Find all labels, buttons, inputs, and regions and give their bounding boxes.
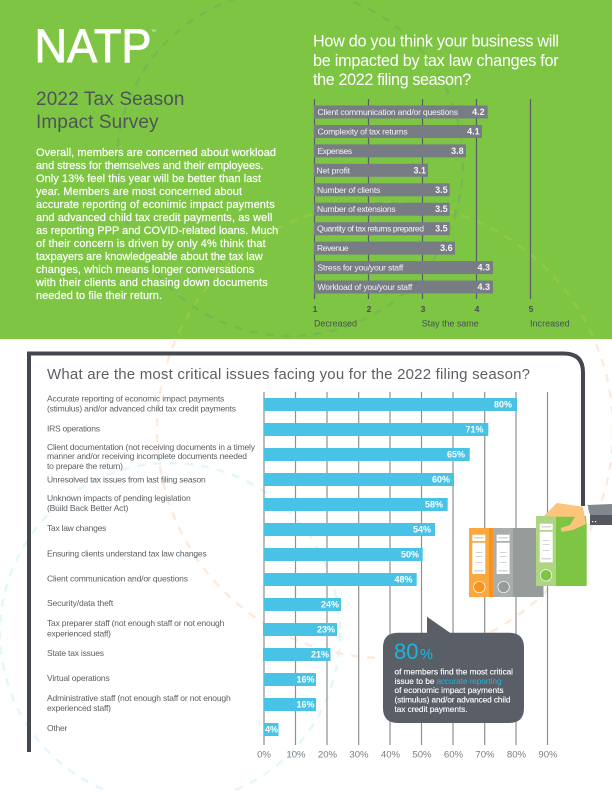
bar chart: business impact: Revenue [317,243,349,253]
icon: sleeve [585,504,612,525]
issue labels: experienced staff) [47,628,111,638]
icon: grey binder [493,528,544,597]
issue labels: Unknown impacts of pending legislation [47,493,191,503]
bar chart: business impact: 3.5 [435,185,448,195]
bar chart: business impact: Expenses [318,146,352,156]
heading: critical issues question: What are the most critical issues facing you for the 2022 filing season? [47,366,530,383]
heading: business impact question: be impacted by tax law changes for [313,52,559,70]
issue labels: Client documentation (not receiving documents in a timely [47,442,256,452]
icon: hand [544,503,586,532]
bar chart: critical issues [47,392,558,760]
percent axis labels: 20% [318,750,338,760]
text block: survey summary: accurate reporting of econimic impact payments [36,199,275,211]
issue labels: Virtual operations [47,673,110,683]
issue labels: Security/data theft [47,598,114,608]
text block: survey summary: year. Members are most concerned about [36,186,242,198]
heading: business impact question [313,32,559,89]
issue labels: Unresolved tax issues from last filing season [47,474,206,484]
icon: green binder [536,516,587,586]
bar chart: business impact: Net profit [316,165,351,175]
callout: 80 percent: of members find the most critical [394,666,513,676]
text block: survey summary: and advanced child tax credit payments, as well [36,212,272,224]
bar chart: business impact: 4.2 [472,107,485,117]
bar chart: critical issues: 48% [394,574,412,584]
percent axis labels: 70% [475,750,495,760]
bar chart: business impact: 4.3 [477,263,490,273]
axis scale labels: 3 [421,304,426,314]
callout: 80 percent: accurate reporting [436,676,502,686]
percent axis labels [257,750,558,760]
axis scale labels [313,304,570,329]
bar chart: business impact: 3.8 [451,146,464,156]
bar chart: critical issues: 24% [321,600,339,610]
bar chart: critical issues: 80% [494,400,512,410]
bar chart: business impact: Complexity of tax returns [318,126,408,136]
issue labels: Client communication and/or questions [47,574,188,584]
bar chart: business impact: Stress for you/your staff [318,263,404,273]
callout: 80 percent: issue to be [394,676,435,686]
bar chart: business impact: 3.5 [435,224,448,234]
bar chart: business impact: Number of clients [317,185,380,195]
text block: survey summary: of their concern is driven by only 4% think that [36,238,266,250]
text block: survey summary: Overall, members are concerned about workload [36,147,276,159]
bar chart: business impact: 4.3 [477,282,490,292]
issue labels: Other [47,723,67,733]
heading: business impact question: How do you think your business will [313,32,559,50]
panel: green header [0,0,612,339]
title: 2022 Tax Season [36,89,184,110]
bar chart: business impact: Quantity of tax returns prepared [317,224,424,234]
bar chart: business impact: Workload of you/your staff [318,282,413,292]
title: Impact Survey [36,112,159,133]
percent axis labels: 80% [507,750,527,760]
percent axis labels: 10% [286,750,306,760]
icon: orange binder [469,528,493,597]
logo: NATP: ™ [151,29,156,35]
text block: survey summary: as reporting PPP and COVID-related loans. Much [36,225,278,237]
bar chart: business impact: Client communication and/or questions [318,107,458,117]
callout: 80 percent: (stimulus) and/or advanced child [394,694,511,704]
panel: critical issues frame [29,354,583,752]
axis scale labels: 5 [529,304,534,314]
heading: business impact question: the 2022 filing season? [313,71,471,89]
percent axis labels: 50% [412,750,432,760]
text block: survey summary: Only 13% feel this year will be better than last [36,173,261,185]
callout: 80 percent [383,617,524,723]
issue labels: (Build Back Better Act) [47,503,128,513]
bar chart: business impact: 3.1 [413,165,426,175]
bar chart: critical issues: 58% [425,500,443,510]
percent axis labels: 90% [538,750,558,760]
text block: survey summary: needed to file their return. [36,290,162,302]
bar chart: business impact [313,99,570,329]
issue labels: Accurate reporting of economic impact payments [47,394,224,404]
issue labels: (stimulus) and/or advanced child tax credit payments [47,404,236,414]
callout: 80 percent: % [420,647,433,663]
bar chart: critical issues: 16% [296,674,314,684]
bar chart: critical issues: 54% [413,524,431,534]
text block: survey summary: changes, which means longer conversations [36,264,255,276]
icon: binders and hand [469,503,612,597]
title [36,89,184,133]
issue labels: Tax preparer staff (not enough staff or not enough [47,618,225,628]
text block: survey summary: with their clients and chasing down documents [35,277,268,289]
issue labels: State tax issues [47,648,104,658]
bar chart: critical issues: 23% [317,624,335,634]
axis scale labels: Increased [530,319,570,329]
issue labels: Ensuring clients understand tax law changes [47,548,207,558]
text block: survey summary [35,147,278,302]
bar chart: critical issues: 16% [296,700,314,710]
issue labels: Tax law changes [47,523,106,533]
bar chart: critical issues: 4% [265,724,278,734]
callout: 80 percent: 80 [394,639,418,664]
axis scale labels: 2 [367,304,372,314]
text block: survey summary: taxpayers are knowledgeable about the tax law [36,251,263,263]
percent axis labels: 40% [381,750,401,760]
bar chart: business impact: Number of extensions [317,204,396,214]
bar chart: business impact: 3.5 [435,204,448,214]
callout: 80 percent: of economic impact payments [394,685,504,695]
bar chart: business impact: 3.6 [440,243,453,253]
bar chart: critical issues: 50% [401,550,419,560]
bar chart: critical issues: 71% [465,424,484,434]
axis scale labels: Stay the same [422,319,479,329]
issue labels: experienced staff) [47,703,111,713]
issue labels: manner and/or receiving incomplete documents needed [47,451,247,461]
axis scale labels: Decreased [314,319,357,329]
issue labels [47,394,256,733]
text block: survey summary: and stress for themselves and their employees. [36,160,264,172]
bar chart: business impact: 4.1 [467,126,480,136]
bar chart: critical issues: 21% [311,650,329,660]
issue labels: to prepare the return) [47,461,123,471]
percent axis labels: 0% [257,750,271,760]
percent axis labels: 60% [444,750,464,760]
bar chart: critical issues: 65% [447,450,465,460]
callout: 80 percent: tax credit payments. [394,704,468,714]
bar chart: critical issues: 60% [432,474,450,484]
issue labels: IRS operations [47,424,100,434]
percent axis labels: 30% [349,750,369,760]
axis scale labels: 1 [313,304,318,314]
issue labels: Administrative staff (not enough staff or not enough [47,693,231,703]
axis scale labels: 4 [475,304,480,314]
logo: NATP: NATP [34,20,152,73]
